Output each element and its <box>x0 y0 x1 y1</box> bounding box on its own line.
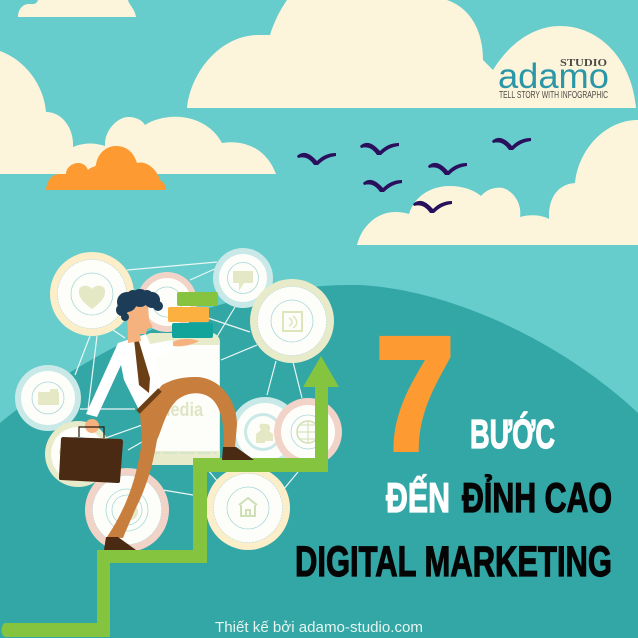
circle: globe <box>274 398 342 466</box>
network lines <box>75 262 302 495</box>
cloud: left <box>0 51 276 174</box>
bird 5 <box>492 138 531 150</box>
circle: pink behind head <box>137 272 197 332</box>
hand on briefcase <box>85 419 99 433</box>
logo: adamo studio: STUDIO <box>560 57 607 69</box>
bird 1 <box>297 153 336 165</box>
shirt and arm <box>86 334 176 417</box>
circle: sound door <box>250 279 334 363</box>
bird 6 <box>413 201 452 213</box>
cloud: right <box>357 120 638 245</box>
belt <box>138 390 160 412</box>
logo: adamo studio: adamo <box>498 57 609 96</box>
footer credit: Thiết kế bởi adamo-studio.com <box>215 619 423 636</box>
bird 4 <box>363 180 402 192</box>
shoes <box>222 447 254 460</box>
bird 2 <box>360 143 399 155</box>
heading: bước: BƯỚC <box>470 411 555 457</box>
heading: đến: ĐẾN <box>386 474 450 521</box>
cloud: orange <box>46 146 166 190</box>
hair <box>116 289 163 321</box>
legs <box>107 377 237 538</box>
books <box>168 292 218 338</box>
hill <box>0 285 638 638</box>
circle: people <box>230 397 300 467</box>
bird 3 <box>428 163 467 175</box>
circle: bottom pink <box>85 468 169 552</box>
cloud: small top left <box>18 0 136 17</box>
circle: target <box>45 421 111 487</box>
circle: chat <box>213 248 273 308</box>
cloud: large top centre <box>187 0 636 108</box>
tie <box>134 338 150 393</box>
face <box>127 305 153 343</box>
circle: house <box>206 466 290 550</box>
briefcase <box>79 427 104 438</box>
number 7: 7 <box>376 304 454 483</box>
phone: social media <box>143 333 220 465</box>
phone: social media: Media <box>157 400 203 421</box>
green stair arrow <box>2 356 339 637</box>
man climbing <box>59 289 254 550</box>
phone: social media: Social <box>163 382 198 396</box>
circle: camera <box>15 365 81 431</box>
circle: heart <box>50 252 134 336</box>
hand on books <box>173 339 199 346</box>
